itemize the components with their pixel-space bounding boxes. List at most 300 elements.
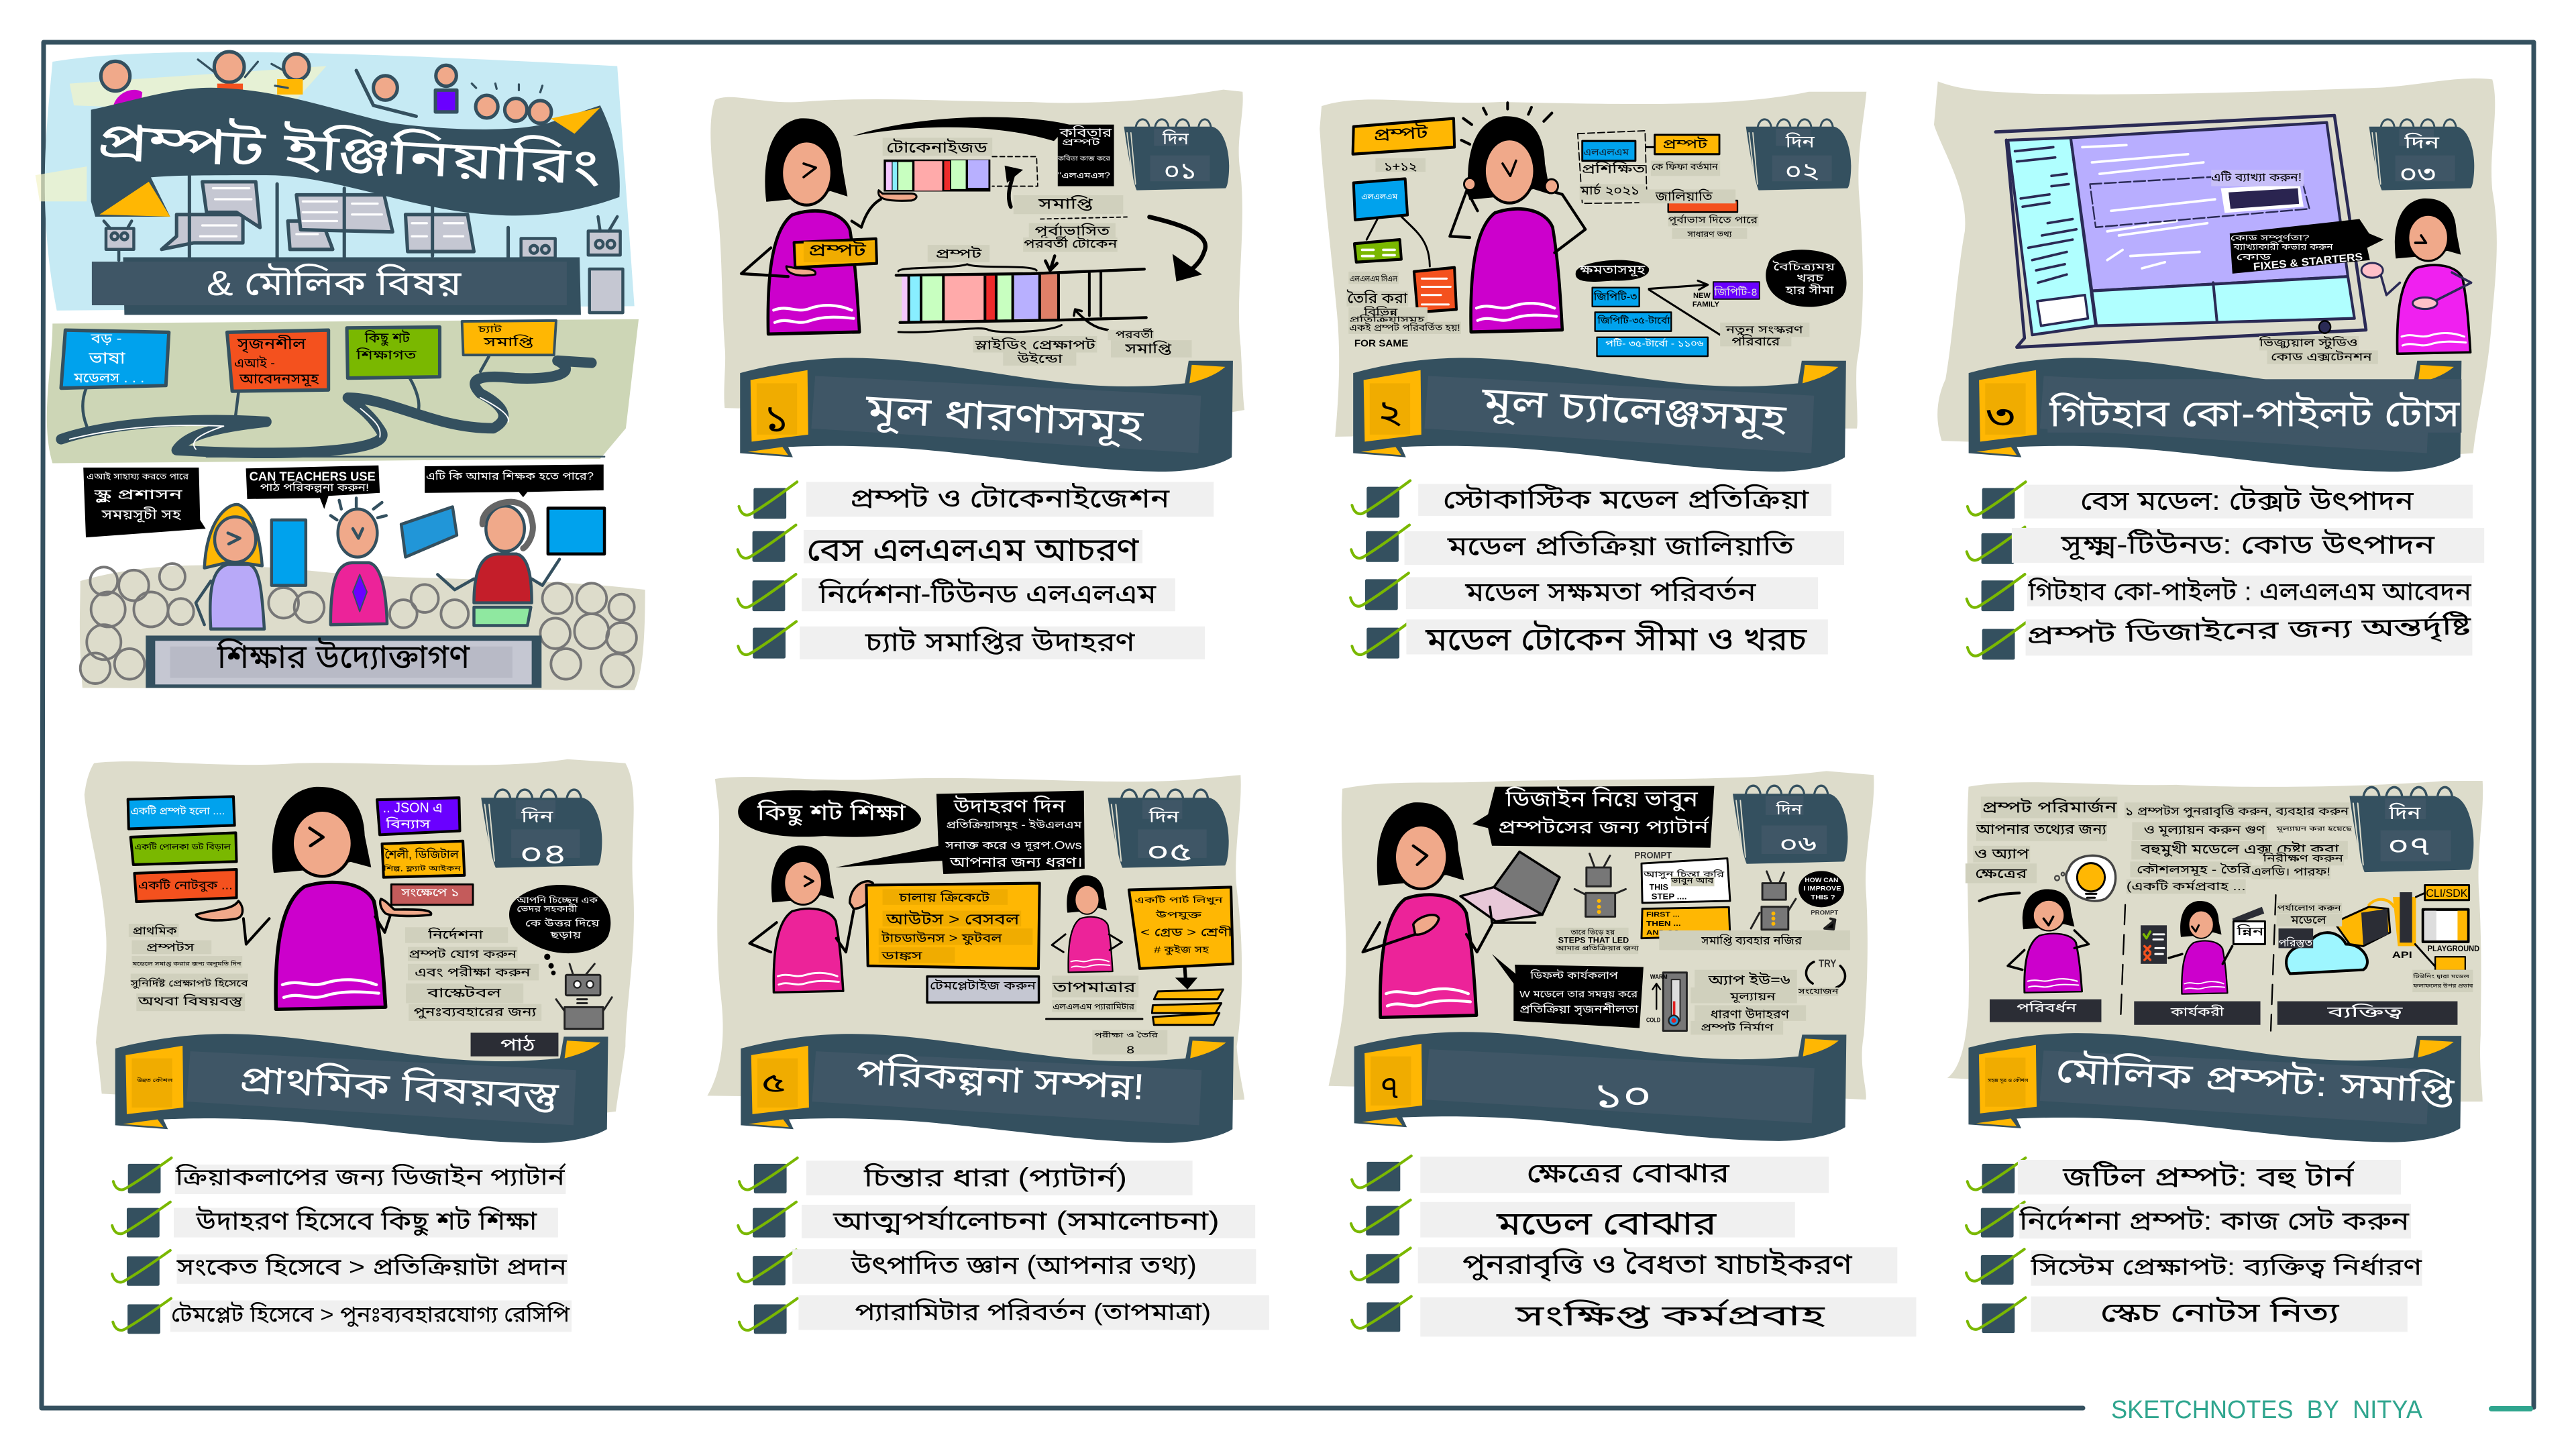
try loop: TRY bbox=[1819, 959, 1836, 970]
educators bbox=[196, 498, 604, 629]
item 3 bbox=[738, 1249, 1256, 1285]
calendar: day 07: দিন bbox=[2388, 802, 2421, 823]
prompt example cards: ভাবুন আব bbox=[1670, 877, 1715, 885]
prompt type cards: একটি পোলকা ডট বিড়াল bbox=[134, 842, 231, 852]
yellow example card: আউটস > বেসবল bbox=[885, 910, 1020, 928]
item 2: মডেল বোঝার bbox=[1496, 1205, 1717, 1242]
calendar: day 01: ০১ bbox=[1164, 158, 1196, 184]
banner: plan complete: ৫ bbox=[761, 1068, 786, 1098]
api cloud illustration: ফলাফলের উপর প্রভাব bbox=[2412, 983, 2473, 989]
robot thought cloud: কে উত্তর দিয়ে bbox=[525, 918, 600, 928]
black callout: default temperature bbox=[1492, 954, 1644, 1028]
banner: basic prompts completion bbox=[1968, 1033, 2461, 1142]
figure a bbox=[1980, 890, 2089, 993]
item 2: উদাহরণ হিসেবে কিছু শট শিক্ষা bbox=[195, 1205, 537, 1236]
item 4 bbox=[113, 1299, 572, 1334]
note: instructions: নির্দেশনা bbox=[427, 926, 484, 941]
yellow example card: টাচডাউনস > ফুটবল bbox=[881, 930, 1002, 946]
note: iterate and evaluate: (একটি কর্মপ্রবাহ ... bbox=[2127, 879, 2246, 893]
panel: title poster bbox=[36, 52, 645, 690]
calendar: day 05 bbox=[1108, 790, 1229, 868]
lesson tag: পাঠ bbox=[500, 1034, 536, 1055]
banner: ten: ৭ bbox=[1380, 1069, 1399, 1104]
item 4: চ্যাট সমাপ্তির উদাহরণ bbox=[865, 627, 1135, 657]
banner: key challenges: মূল চ্যালেঞ্জসমূহ bbox=[1480, 379, 1788, 442]
item 1: ক্ষেত্রের বোঝার bbox=[1527, 1157, 1729, 1188]
note: iterate and evaluate: কৌশলসমূহ - তৈরি bbox=[2137, 863, 2251, 877]
item 2 bbox=[1967, 527, 2484, 564]
calendar: day 07 bbox=[2349, 787, 2473, 872]
fabrication callouts: মার্চ ২০২১ bbox=[1580, 182, 1640, 197]
robot thought cloud: ছড়ায় bbox=[549, 930, 582, 941]
item 2: আত্মপর্যালোচনা (সমালোচনা) bbox=[833, 1205, 1220, 1236]
item 1 bbox=[1968, 1158, 2401, 1195]
label: personality: ব্যক্তিত্ব bbox=[2326, 1004, 2404, 1020]
watercolor wash background bbox=[36, 52, 639, 464]
item 1 bbox=[739, 1158, 1193, 1195]
black callout: give examples bbox=[835, 791, 1085, 874]
panel background bbox=[1934, 78, 2497, 458]
yellow template card bbox=[1129, 887, 1233, 969]
clapperboard bbox=[2233, 907, 2265, 944]
figure b bbox=[2169, 901, 2233, 994]
fabrication callouts bbox=[1578, 131, 1759, 239]
calendar: day 01: দিন bbox=[1162, 129, 1189, 148]
fabrication callouts: কে ফিফা বর্তমান bbox=[1652, 162, 1718, 172]
note: instructions: পুনঃব্যবহারের জন্য bbox=[414, 1004, 537, 1019]
black callout: give examples: আপনার জন্য ধরণ। bbox=[949, 855, 1083, 870]
item 2: নির্দেশনা প্রম্পট: কাজ সেট করুন bbox=[2019, 1205, 2410, 1236]
panel background bbox=[1329, 771, 1874, 1099]
item 2 bbox=[1351, 525, 1844, 565]
calendar: day 03: দিন bbox=[2404, 132, 2440, 152]
try loop bbox=[1797, 959, 1845, 996]
label: personality bbox=[2277, 1002, 2457, 1025]
prompt example cards: PROMPT bbox=[1634, 850, 1672, 861]
panel: lesson 1 bbox=[710, 90, 1244, 659]
black cloud: rate limits: হার সীমা bbox=[1785, 283, 1834, 297]
prompt to llm flow: এলএলএম bbox=[1361, 192, 1398, 201]
callout: school admin: এআই সাহায্য করতে পারে bbox=[87, 471, 189, 482]
fabrication callouts: এলএলএম bbox=[1583, 147, 1629, 158]
label: performance bbox=[2134, 1002, 2261, 1025]
item 4 bbox=[1352, 1297, 1916, 1336]
robot asking to improve: HOW CAN bbox=[1805, 877, 1839, 883]
divider bbox=[207, 455, 604, 458]
robot thought cloud: ভেদর সহকারী bbox=[517, 904, 578, 914]
calendar: day 04: দিন bbox=[521, 807, 553, 826]
caption: vs code extension: ভিজ্যুয়াল স্টুডিও bbox=[2259, 336, 2357, 350]
output format cards: শিল্প, ফ্ল্যাট আইকন bbox=[382, 864, 462, 873]
sign: large language models: বড় - bbox=[91, 331, 122, 347]
banner: github copilot tools: গিটহাব কো-পাইলট টোস bbox=[2049, 392, 2461, 435]
item 1 bbox=[1352, 1156, 1829, 1193]
callout: school admin: স্কুল প্রশাসন bbox=[93, 487, 182, 502]
label: explain this: এটি ব্যাখ্যা করুন! bbox=[2211, 171, 2302, 184]
item 1 bbox=[739, 482, 1214, 519]
model family diagram: পটি- ৩৫-টার্বো - ১১০৬ bbox=[1605, 338, 1704, 348]
note: primary prompts: মডেলে সমাপ্ত করার জন্য অনুমতি দিন bbox=[131, 960, 241, 968]
item 3: পুনরাবৃত্তি ও বৈধতা যাচাইকরণ bbox=[1462, 1248, 1853, 1282]
black callout: think about design bbox=[1472, 786, 1715, 848]
lesson tag bbox=[471, 1032, 558, 1057]
item 3 bbox=[738, 574, 1175, 611]
thermometer bbox=[1646, 973, 1686, 1031]
note: primary prompts: প্রাথমিক bbox=[133, 924, 178, 937]
temperature note: তাপমাত্রার bbox=[1052, 979, 1136, 996]
item 4 bbox=[738, 621, 1205, 659]
panel: lesson 3 bbox=[1934, 78, 2497, 659]
calendar: day 07: ০৭ bbox=[2387, 831, 2430, 861]
model family diagram: নতুন সংস্করণ bbox=[1725, 324, 1803, 336]
item 3: সংকেত হিসেবে > প্রতিক্রিয়াটা প্রদান bbox=[176, 1253, 568, 1280]
column dividers bbox=[2121, 895, 2275, 1031]
idea cloud with bulb bbox=[2055, 855, 2116, 901]
label: refinement bbox=[1990, 1000, 2101, 1022]
yellow template card: < গ্রেড > শ্রেণী bbox=[1140, 926, 1232, 939]
banner: key challenges: ২ bbox=[1377, 392, 1401, 432]
api cloud illustration: টিউনিং দ্বারা মডেল bbox=[2412, 973, 2470, 979]
calendar: day 06: ০৬ bbox=[1779, 832, 1817, 857]
evaluate note: মূল্যায়ন bbox=[1729, 991, 1776, 1003]
black callout: poem prompt: "এলএমএস? bbox=[1058, 170, 1110, 180]
thermometer: COLD bbox=[1646, 1017, 1660, 1024]
prompt to llm flow: প্রতিক্রিয়াসমূহ bbox=[1349, 314, 1426, 325]
speech bubbles and poles bbox=[162, 175, 508, 258]
prompt to llm flow: প্রম্পট bbox=[1373, 122, 1429, 145]
model family diagram: জিপিটি-৩ bbox=[1593, 290, 1637, 303]
robot and caption: আমার প্রতিক্রিয়ার জন্য bbox=[1555, 944, 1640, 951]
black callout: give examples: সনাক্ত করে ও দূরপ.Ows bbox=[945, 839, 1082, 852]
calendar: day 05: ০৫ bbox=[1146, 837, 1193, 867]
checklist bbox=[1350, 480, 1844, 659]
black callout: default temperature: প্রতিক্রিয়া সৃজনশীলতা bbox=[1519, 1003, 1639, 1016]
banner folds bbox=[99, 107, 600, 217]
item 3 bbox=[1351, 1247, 1897, 1283]
callout: teachers bbox=[246, 466, 380, 509]
model family diagram bbox=[1576, 260, 1809, 356]
note: prompt refinement bbox=[1966, 796, 2118, 883]
prompt to llm flow: ১+১২ bbox=[1384, 160, 1417, 173]
subtitle bar bbox=[92, 257, 581, 315]
panel: lesson 5 bbox=[707, 775, 1269, 1334]
note: prompt refinement: আপনার তথ্যের জন্য bbox=[1976, 822, 2106, 837]
label: explain this bbox=[2211, 170, 2304, 186]
sliding window diagram: সমাপ্তি bbox=[1038, 196, 1093, 212]
api cloud illustration: API bbox=[2392, 949, 2412, 960]
prompt example cards: FIRST ... bbox=[1646, 910, 1680, 918]
robot and caption bbox=[1555, 854, 1640, 954]
output format cards: শৈলী, ডিজিটাল bbox=[384, 847, 459, 861]
calendar: day 03 bbox=[2369, 119, 2474, 191]
note: iterate and evaluate: এলডি। পারফ! bbox=[2251, 865, 2330, 878]
calendar: day 03: ০৩ bbox=[2399, 160, 2436, 188]
checklist bbox=[1966, 1158, 2422, 1333]
crowd backdrop bbox=[80, 565, 645, 690]
robots bbox=[104, 217, 623, 313]
banner: key concepts: মূল ধারণাসমূহ bbox=[864, 385, 1145, 449]
black callout: code explanations: কোড bbox=[2237, 252, 2272, 262]
sign: generative ai: আবেদনসমূহ bbox=[239, 371, 319, 388]
api cloud illustration: CLI/SDK bbox=[2426, 888, 2467, 900]
prompt type cards bbox=[128, 796, 237, 902]
black cloud: rate limits: খরচ bbox=[1796, 272, 1824, 284]
prompt to llm flow: এলএলএম সিএল bbox=[1350, 273, 1397, 284]
label: refinement: পরিবর্ধন bbox=[2017, 1000, 2077, 1014]
sign: generative ai: এআই - bbox=[234, 355, 275, 370]
item 1: ক্রিয়াকলাপের জন্য ডিজাইন প্যাটার্ন bbox=[175, 1163, 566, 1191]
fabrication callouts: জালিয়াতি bbox=[1655, 188, 1713, 204]
panel: lesson 7 bbox=[1947, 781, 2483, 1333]
item 1: বেস মডেল: টেক্সট উৎপাদন bbox=[2080, 486, 2414, 516]
prompt example cards: THEN ... bbox=[1646, 920, 1681, 928]
item 2 bbox=[1351, 1200, 1795, 1242]
tokenized diagram: টোকেনাইজড bbox=[886, 139, 988, 156]
robot thought cloud bbox=[509, 885, 612, 1029]
sliding window diagram: প্রম্পট bbox=[935, 246, 982, 262]
label: performance: কার্যকরী bbox=[2170, 1004, 2224, 1018]
item 4: সংক্ষিপ্ত কর্মপ্রবাহ bbox=[1515, 1299, 1825, 1331]
figure with hand on heart bbox=[1363, 802, 1492, 1018]
yellow example card: চালায় ক্রিকেটে bbox=[898, 890, 990, 904]
banner: github copilot tools: ৩ bbox=[1986, 396, 2015, 436]
prompt type cards: একটি নোটবুক ... bbox=[138, 878, 233, 892]
calendar: day 01 bbox=[1124, 119, 1229, 191]
sign: chat completions: চ্যাট bbox=[477, 323, 502, 335]
checklist clipboard bbox=[2141, 925, 2167, 964]
banner: ten bbox=[1354, 1032, 1846, 1141]
presenter figure bbox=[741, 118, 916, 334]
item 4: স্কেচ নোটস নিত্য bbox=[2100, 1297, 2340, 1328]
note: iterate and evaluate: ও মূল্যায়ন করুন গুণ bbox=[2144, 822, 2265, 837]
banner: key concepts: ১ bbox=[764, 396, 788, 440]
item 1 bbox=[113, 1158, 566, 1194]
column labels bbox=[1990, 1000, 2457, 1025]
code editor illustration bbox=[1996, 115, 2366, 347]
note: primary prompts: অথবা বিষয়বস্তু bbox=[138, 993, 243, 1008]
note: prompt refinement: ক্ষেত্রের bbox=[1975, 866, 2027, 881]
item 1: জটিল প্রম্পট: বহু টার্ন bbox=[2062, 1161, 2355, 1192]
test note: পরীক্ষা ও তৈরি bbox=[1094, 1030, 1159, 1040]
item 1 bbox=[1352, 480, 1831, 518]
prompt to llm flow bbox=[1346, 119, 1461, 349]
item 2 bbox=[738, 525, 1142, 568]
robot and caption: তারে ভিড়ে হয় bbox=[1570, 928, 1615, 936]
item 3: মডেল সক্ষমতা পরিবর্তন bbox=[1464, 576, 1756, 607]
tokenized diagram bbox=[883, 138, 1038, 207]
item 3 bbox=[112, 1250, 568, 1286]
model family diagram: জিপিটি-৩৫-টার্বো bbox=[1597, 314, 1670, 327]
prompt example cards: AND SO ... bbox=[1646, 928, 1690, 936]
prompt to llm flow: তৈরি করা bbox=[1346, 290, 1407, 307]
note: instructions bbox=[405, 926, 541, 1021]
sliding window diagram bbox=[896, 195, 1205, 366]
robot asking to improve: PROMPT bbox=[1811, 909, 1839, 916]
item 2: মডেল প্রতিক্রিয়া জালিয়াতি bbox=[1447, 531, 1795, 561]
fabrication callouts: সাধারণ তথ্য bbox=[1686, 229, 1732, 239]
panel background bbox=[707, 775, 1244, 1102]
item 4: মডেল টোকেন সীমা ও খরচ bbox=[1425, 620, 1808, 658]
item 2 bbox=[738, 1202, 1255, 1238]
calendar: day 06: দিন bbox=[1775, 801, 1803, 818]
subtitle text: & মৌলিক বিষয় bbox=[207, 264, 462, 303]
black callout: give examples: উদাহরণ দিন bbox=[953, 796, 1067, 816]
confused figure bbox=[1450, 103, 1585, 332]
model family diagram: NEW bbox=[1693, 292, 1711, 300]
sign: few shot bbox=[347, 327, 439, 378]
calendar: day 04 bbox=[481, 790, 602, 869]
sign: chat completions bbox=[462, 321, 556, 355]
note: iterate and evaluate: মূল্যায়ন করা হয়েছে bbox=[2275, 825, 2352, 833]
model family diagram: ক্ষমতাসমূহ bbox=[1578, 262, 1646, 277]
sliding window diagram: উইন্ডো bbox=[1016, 352, 1063, 366]
sign: large language models bbox=[61, 330, 489, 426]
note: primary prompts: প্রম্পটস bbox=[146, 941, 195, 954]
figure a bbox=[749, 846, 873, 992]
panel background bbox=[1947, 781, 2483, 1102]
yellow template card: একটি পার্ট লিখুন bbox=[1134, 895, 1223, 906]
prompt example cards: STEP .... bbox=[1652, 893, 1686, 902]
checklist bbox=[738, 1158, 1269, 1334]
item 4: প্যারামিটার পরিবর্তন (তাপমাত্রা) bbox=[855, 1297, 1211, 1326]
robot asking to improve: I IMPROVE bbox=[1804, 885, 1841, 892]
sign: education entrepreneurs bbox=[146, 635, 541, 688]
sign: education entrepreneurs: শিক্ষার উদ্যোক্তাগণ bbox=[217, 638, 470, 676]
black callout: code explanations: কোড সম্পূর্ণতা? bbox=[2231, 232, 2310, 243]
panel: lesson 6 bbox=[1329, 771, 1916, 1336]
sliding window diagram: পরবর্তী bbox=[1116, 327, 1154, 341]
fabrication callouts: প্রশিক্ষিত bbox=[1582, 160, 1646, 176]
yellow template card: # কুইজ সহ bbox=[1154, 944, 1209, 955]
api cloud illustration: পর্যালোগ করুন bbox=[2277, 903, 2342, 913]
calendar: day 02: ০২ bbox=[1785, 159, 1819, 184]
figure with open arms bbox=[196, 787, 431, 1010]
item 2 bbox=[1966, 1202, 2411, 1238]
item 3 bbox=[1967, 574, 2472, 611]
item 2: সূক্ষ্ম-টিউনড: কোড উৎপাদন bbox=[2060, 529, 2435, 560]
black callout: think about design: ডিজাইন নিয়ে ভাবুন bbox=[1505, 786, 1699, 812]
calendar: day 06 bbox=[1733, 786, 1847, 864]
prompt example cards bbox=[1634, 850, 1850, 950]
temperature note: এলএলএম প্যারামিটার bbox=[1053, 1002, 1135, 1011]
sign: generative ai: সৃজনশীল bbox=[237, 334, 307, 354]
sliding window diagram: স্লাইডিং প্রেক্ষাপট bbox=[974, 337, 1096, 353]
banner: key concepts bbox=[740, 358, 1233, 472]
api cloud illustration: পরিস্তুত bbox=[2279, 936, 2312, 949]
note: iterate and evaluate: ১ প্রম্পটস পুনরাবৃত্তি করুন, ব্যবহার করুন bbox=[2125, 804, 2349, 818]
black callout: default temperature: W মডেলে তার সমন্বয় করে bbox=[1519, 989, 1638, 1000]
yellow template card: উপযুক্ত bbox=[1155, 910, 1202, 920]
output format cards: .. JSON এ bbox=[383, 800, 443, 816]
test note bbox=[1092, 1030, 1167, 1057]
credit: sketchnotes by nitya: SKETCHNOTES BY NITYA bbox=[2111, 1396, 2423, 1424]
checklist bbox=[1967, 482, 2484, 659]
try loop: সংযোজন bbox=[1797, 987, 1839, 996]
model family diagram: পরিবারে bbox=[1731, 335, 1780, 348]
callout: can it be my tutor: এটি কি আমার শিক্ষক হতে পারে? bbox=[426, 470, 594, 482]
templatize label: টেমপ্লেটাইজ করুন bbox=[930, 979, 1036, 992]
callout: school admin bbox=[83, 468, 206, 537]
sliding window diagram: সমাপ্তি bbox=[1124, 340, 1172, 357]
banner: ten: ১০ bbox=[1593, 1076, 1652, 1116]
output format cards bbox=[377, 798, 473, 905]
laptop bbox=[1460, 852, 1560, 922]
yellow example card: ডাঙ্কস bbox=[881, 950, 923, 962]
callout: teachers: CAN TEACHERS USE bbox=[250, 470, 376, 484]
callout: can it be my tutor bbox=[425, 464, 604, 497]
black cloud: rate limits bbox=[1766, 250, 1847, 307]
prompt example cards: আসুন চিন্তা করি bbox=[1642, 869, 1725, 880]
note: instructions: বাস্কেটবল bbox=[426, 985, 502, 1001]
road bbox=[61, 361, 592, 453]
black callout: poem prompt: কবিতা কাজ করে bbox=[1057, 154, 1110, 163]
evaluate note bbox=[1690, 970, 1806, 1034]
prompt example cards: THIS bbox=[1650, 883, 1668, 892]
note: iterate and evaluate: বহুমুখী মডেলে এক্স চেষ্টা করা bbox=[2140, 841, 2340, 857]
banner: primary content: উন্নত কৌশল bbox=[136, 1077, 174, 1083]
calendar: day 02 bbox=[1746, 119, 1851, 191]
note: iterate and evaluate bbox=[2125, 802, 2352, 894]
arrow and paper stack bbox=[1152, 968, 1224, 1025]
caption: vs code extension: কোড এক্সটেনশন bbox=[2271, 350, 2373, 364]
sliding window diagram: পরবর্তী টোকেন bbox=[1024, 235, 1118, 250]
presenter figure bbox=[2361, 199, 2471, 354]
temperature note bbox=[1046, 975, 1142, 1019]
sign: large language models: ভাষা bbox=[88, 350, 125, 368]
item 4 bbox=[1352, 619, 1828, 659]
banner: plan complete bbox=[741, 1034, 1234, 1143]
banner: basic prompts completion: মৌলিক প্রম্পট: সমাপ্তি bbox=[2055, 1049, 2456, 1112]
checklist bbox=[112, 1158, 572, 1334]
robot asking to improve: THIS ? bbox=[1811, 894, 1835, 901]
sign: few shot: কিছু শট bbox=[364, 329, 411, 346]
panel background bbox=[1320, 92, 1866, 437]
banner: github copilot tools bbox=[1969, 358, 2461, 472]
figure b bbox=[1052, 875, 1122, 972]
black callout: give examples: প্রতিক্রিয়াসমূহ - ইউএলএম bbox=[946, 818, 1082, 830]
item 4 bbox=[1968, 1297, 2408, 1333]
calendar: day 02: দিন bbox=[1784, 132, 1815, 152]
note: instructions: এবং পরীক্ষা করুন bbox=[415, 964, 531, 979]
panel background bbox=[85, 759, 634, 1118]
banner: basic prompts completion: সহজ সূত্র ও কৌশল bbox=[1987, 1077, 2029, 1084]
output format cards: সংক্ষেপে ১ bbox=[400, 887, 459, 899]
thermometer: WARM bbox=[1650, 973, 1668, 980]
black callout: poem prompt: প্রম্পট bbox=[1062, 137, 1101, 147]
prompt type cards: একটি প্রম্পট হলো .... bbox=[131, 804, 225, 817]
black cloud: few shot learning bbox=[738, 790, 921, 837]
label: prompt card: প্রম্পট bbox=[808, 240, 866, 260]
black cloud: rate limits: বৈচিত্র্যময় bbox=[1772, 260, 1835, 273]
evaluate note: ধারণা উদাহরণ bbox=[1711, 1006, 1789, 1021]
calendar: day 05: দিন bbox=[1148, 807, 1179, 826]
api cloud illustration bbox=[2277, 885, 2479, 992]
item 2: বেস এলএলএম আচরণ bbox=[807, 532, 1139, 568]
sliding window diagram: পূর্বাভাসিত bbox=[1034, 221, 1110, 239]
item 2 bbox=[112, 1202, 558, 1238]
black callout: poem prompt bbox=[853, 117, 1114, 186]
test note: ৪ bbox=[1126, 1042, 1135, 1057]
output format cards: বিন্যাস bbox=[385, 816, 431, 830]
prompt to llm flow: বিভিন্ন bbox=[1363, 305, 1398, 319]
item 4 bbox=[1968, 610, 2472, 659]
robot asking to improve bbox=[1751, 871, 1844, 930]
item 3: নির্দেশনা-টিউনড এলএলএম bbox=[818, 578, 1157, 609]
label: prompt card bbox=[786, 239, 877, 276]
black callout: think about design: প্রম্পটসের জন্য প্যাটার্ন bbox=[1498, 816, 1711, 837]
item 3: উৎপাদিত জ্ঞান (আপনার তথ্য) bbox=[850, 1250, 1197, 1280]
people on banner bbox=[101, 52, 551, 123]
